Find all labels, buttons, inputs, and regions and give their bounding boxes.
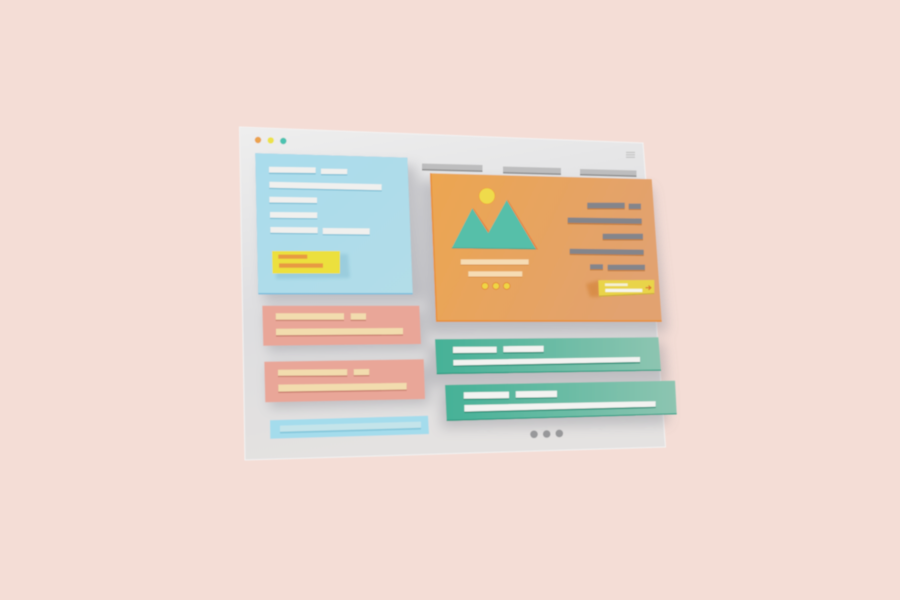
panel: orange card (430, 173, 662, 322)
shadows under panels (262, 162, 668, 428)
pagination dots (482, 283, 510, 289)
panel: pink card two (264, 359, 425, 402)
arrow icon (646, 286, 651, 290)
yellow button (272, 251, 350, 279)
panel: green card one (435, 337, 661, 374)
panel: green card two (445, 381, 677, 421)
image caption bars (461, 259, 529, 278)
panel: pink card one (262, 306, 421, 346)
text bars in blue card (269, 167, 382, 236)
navigation tabs (422, 164, 636, 177)
panel: blue card (255, 153, 413, 294)
grey text bars (568, 203, 645, 271)
panel: light blue bar (270, 416, 429, 439)
image icon: sun (479, 188, 495, 204)
yellow button with arrow (586, 280, 654, 297)
browser window (240, 127, 677, 460)
footer dots (530, 430, 563, 438)
image icon: mountains (452, 200, 538, 250)
menu icon (626, 152, 635, 158)
window control dots (255, 137, 286, 144)
